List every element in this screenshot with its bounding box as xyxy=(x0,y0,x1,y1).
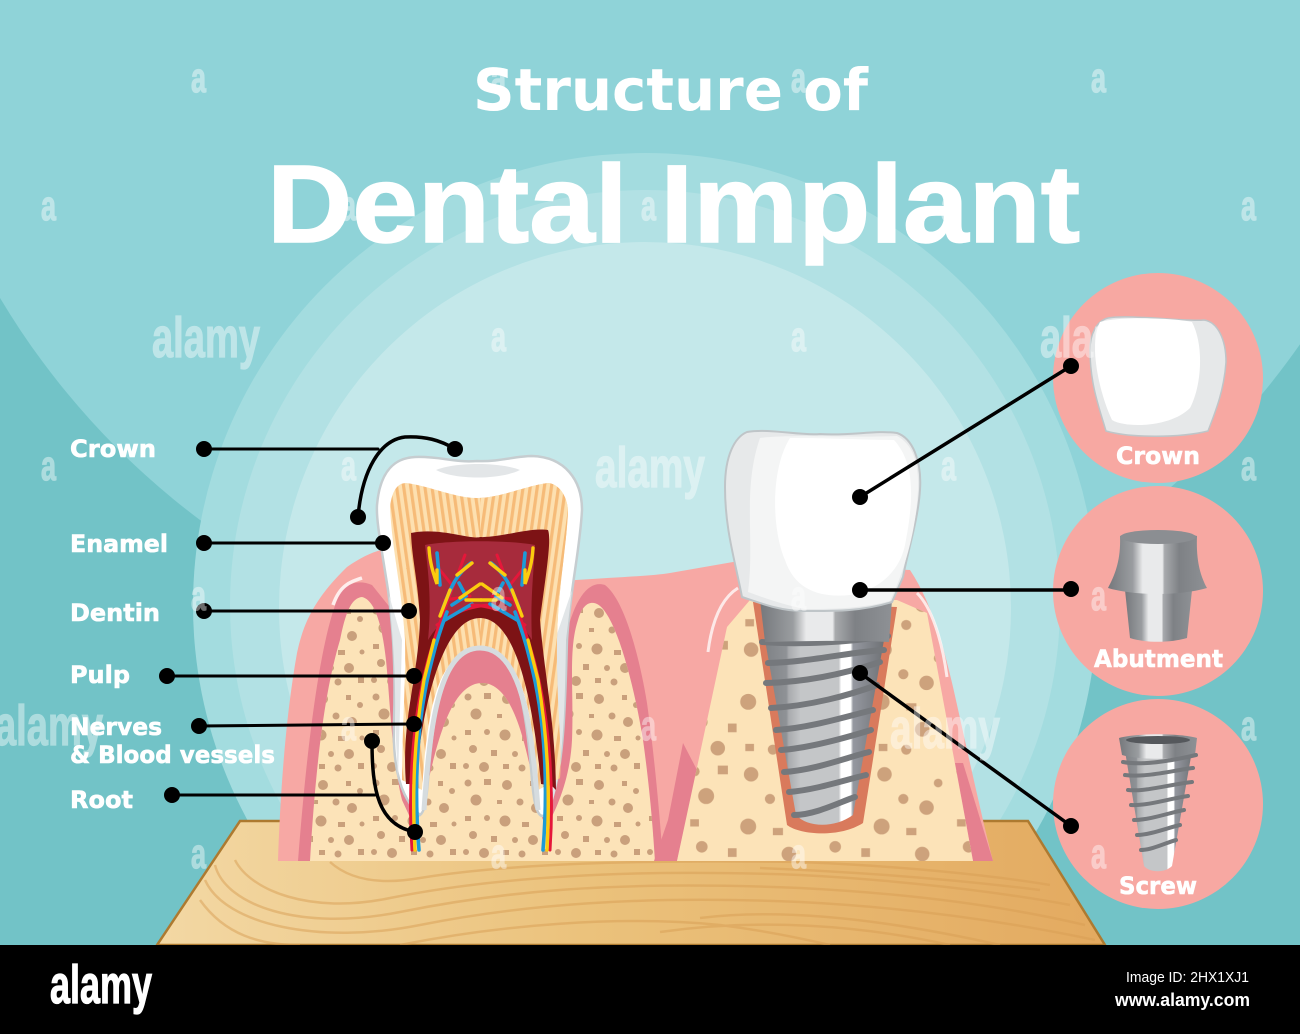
label: crown: Crown xyxy=(70,435,156,463)
leader: crown xyxy=(198,437,462,524)
crown mid shade xyxy=(748,436,918,609)
gum dark right xyxy=(955,763,993,861)
watermarks: a xyxy=(491,830,506,877)
component circle: abutment xyxy=(1053,486,1263,696)
gum dark notch xyxy=(654,743,697,861)
leader: nerves xyxy=(192,718,420,732)
leader: implant crown xyxy=(854,360,1078,504)
watermarks: a xyxy=(791,313,806,360)
title xyxy=(267,56,1080,266)
watermarks: a xyxy=(641,182,656,229)
gum highlights xyxy=(708,588,947,677)
icon: crown xyxy=(1090,317,1226,436)
gum xyxy=(278,550,993,861)
nerves and vessels: right half xyxy=(472,548,551,850)
watermarks: a xyxy=(941,442,956,489)
label: crown: Crown xyxy=(1116,442,1200,470)
watermarks: alamy xyxy=(595,436,705,500)
watermarks: a xyxy=(341,702,356,749)
component circle: screw xyxy=(1053,699,1263,909)
icon: abutment xyxy=(1108,530,1207,642)
implant diagram xyxy=(654,431,993,861)
footer logo: alamy xyxy=(50,955,152,1015)
watermarks: a xyxy=(1091,830,1106,877)
bone speckles xyxy=(310,597,655,861)
watermarks: alamy xyxy=(1040,306,1148,370)
watermarks: a xyxy=(341,182,356,229)
label: nerves: Nerves xyxy=(70,713,162,741)
component circle: crown xyxy=(1053,273,1263,483)
watermarks: a xyxy=(191,830,206,877)
pulp core xyxy=(425,541,535,640)
watermarks xyxy=(0,54,1256,877)
watermarks: alamy xyxy=(890,697,1000,761)
watermarks: a xyxy=(491,572,506,619)
implant crown xyxy=(725,431,920,611)
watermarks: alamy xyxy=(152,306,260,370)
wooden table xyxy=(157,821,1105,945)
label: dentin: Dentin xyxy=(70,599,160,627)
crown highlight xyxy=(775,438,911,596)
watermarks: a xyxy=(1241,182,1256,229)
bone xyxy=(310,597,655,861)
label: root: Root xyxy=(70,786,133,814)
watermarks: a xyxy=(1091,54,1106,101)
watermarks: a xyxy=(491,54,506,101)
watermarks: a xyxy=(1091,572,1106,619)
label: screw: Screw xyxy=(1119,872,1197,900)
label: abutment: Abutment xyxy=(1094,645,1223,673)
watermarks: a xyxy=(941,182,956,229)
label: enamel: Enamel xyxy=(70,530,168,558)
watermarks: a xyxy=(791,54,806,101)
watermarks: a xyxy=(491,313,506,360)
left labels xyxy=(70,435,275,814)
leader lines xyxy=(160,360,1078,838)
leader: implant screw xyxy=(854,666,1078,832)
enamel and cementum xyxy=(377,456,582,816)
watermarks: a xyxy=(191,54,206,101)
bone speckles: implant xyxy=(677,600,973,861)
dentin xyxy=(390,483,568,790)
watermarks: a xyxy=(41,182,56,229)
screw threads xyxy=(762,636,888,815)
leader: dentin xyxy=(198,604,416,618)
root lining xyxy=(389,595,402,780)
label: pulp: Pulp xyxy=(70,661,130,689)
footer bar xyxy=(0,945,1300,1034)
watermarks: a xyxy=(191,572,206,619)
watermarks: a xyxy=(1241,442,1256,489)
leader: implant abutment xyxy=(854,582,1078,596)
socket lining xyxy=(424,648,538,810)
icon: screw xyxy=(1119,734,1197,871)
gum inner left xyxy=(298,582,425,861)
implant socket xyxy=(753,602,897,833)
natural tooth diagram xyxy=(278,456,993,861)
watermarks: a xyxy=(1241,702,1256,749)
watermarks: a xyxy=(791,572,806,619)
watermarks: a xyxy=(641,702,656,749)
title line one: Structure of xyxy=(473,56,869,124)
watermarks: a xyxy=(41,442,56,489)
bone: implant xyxy=(677,600,973,861)
leader: pulp xyxy=(160,670,420,682)
title line two: Dental Implant xyxy=(267,143,1080,266)
screw body xyxy=(765,640,884,825)
watermarks: a xyxy=(341,442,356,489)
nerves and vessels: left half xyxy=(411,548,490,850)
image id: Image ID: 2HX1XJ1 xyxy=(1126,969,1249,986)
pulp chamber xyxy=(405,529,556,790)
gum highlight xyxy=(333,578,362,605)
footer url: www.alamy.com xyxy=(1114,990,1250,1010)
leader: enamel xyxy=(198,536,390,550)
leader: root xyxy=(166,734,422,838)
occlusal shade xyxy=(436,464,520,478)
label: blood vessels: & Blood vessels xyxy=(70,741,275,769)
abutment xyxy=(760,600,892,642)
watermarks: a xyxy=(791,830,806,877)
socket pink xyxy=(418,648,544,840)
gum inner right xyxy=(530,584,663,861)
